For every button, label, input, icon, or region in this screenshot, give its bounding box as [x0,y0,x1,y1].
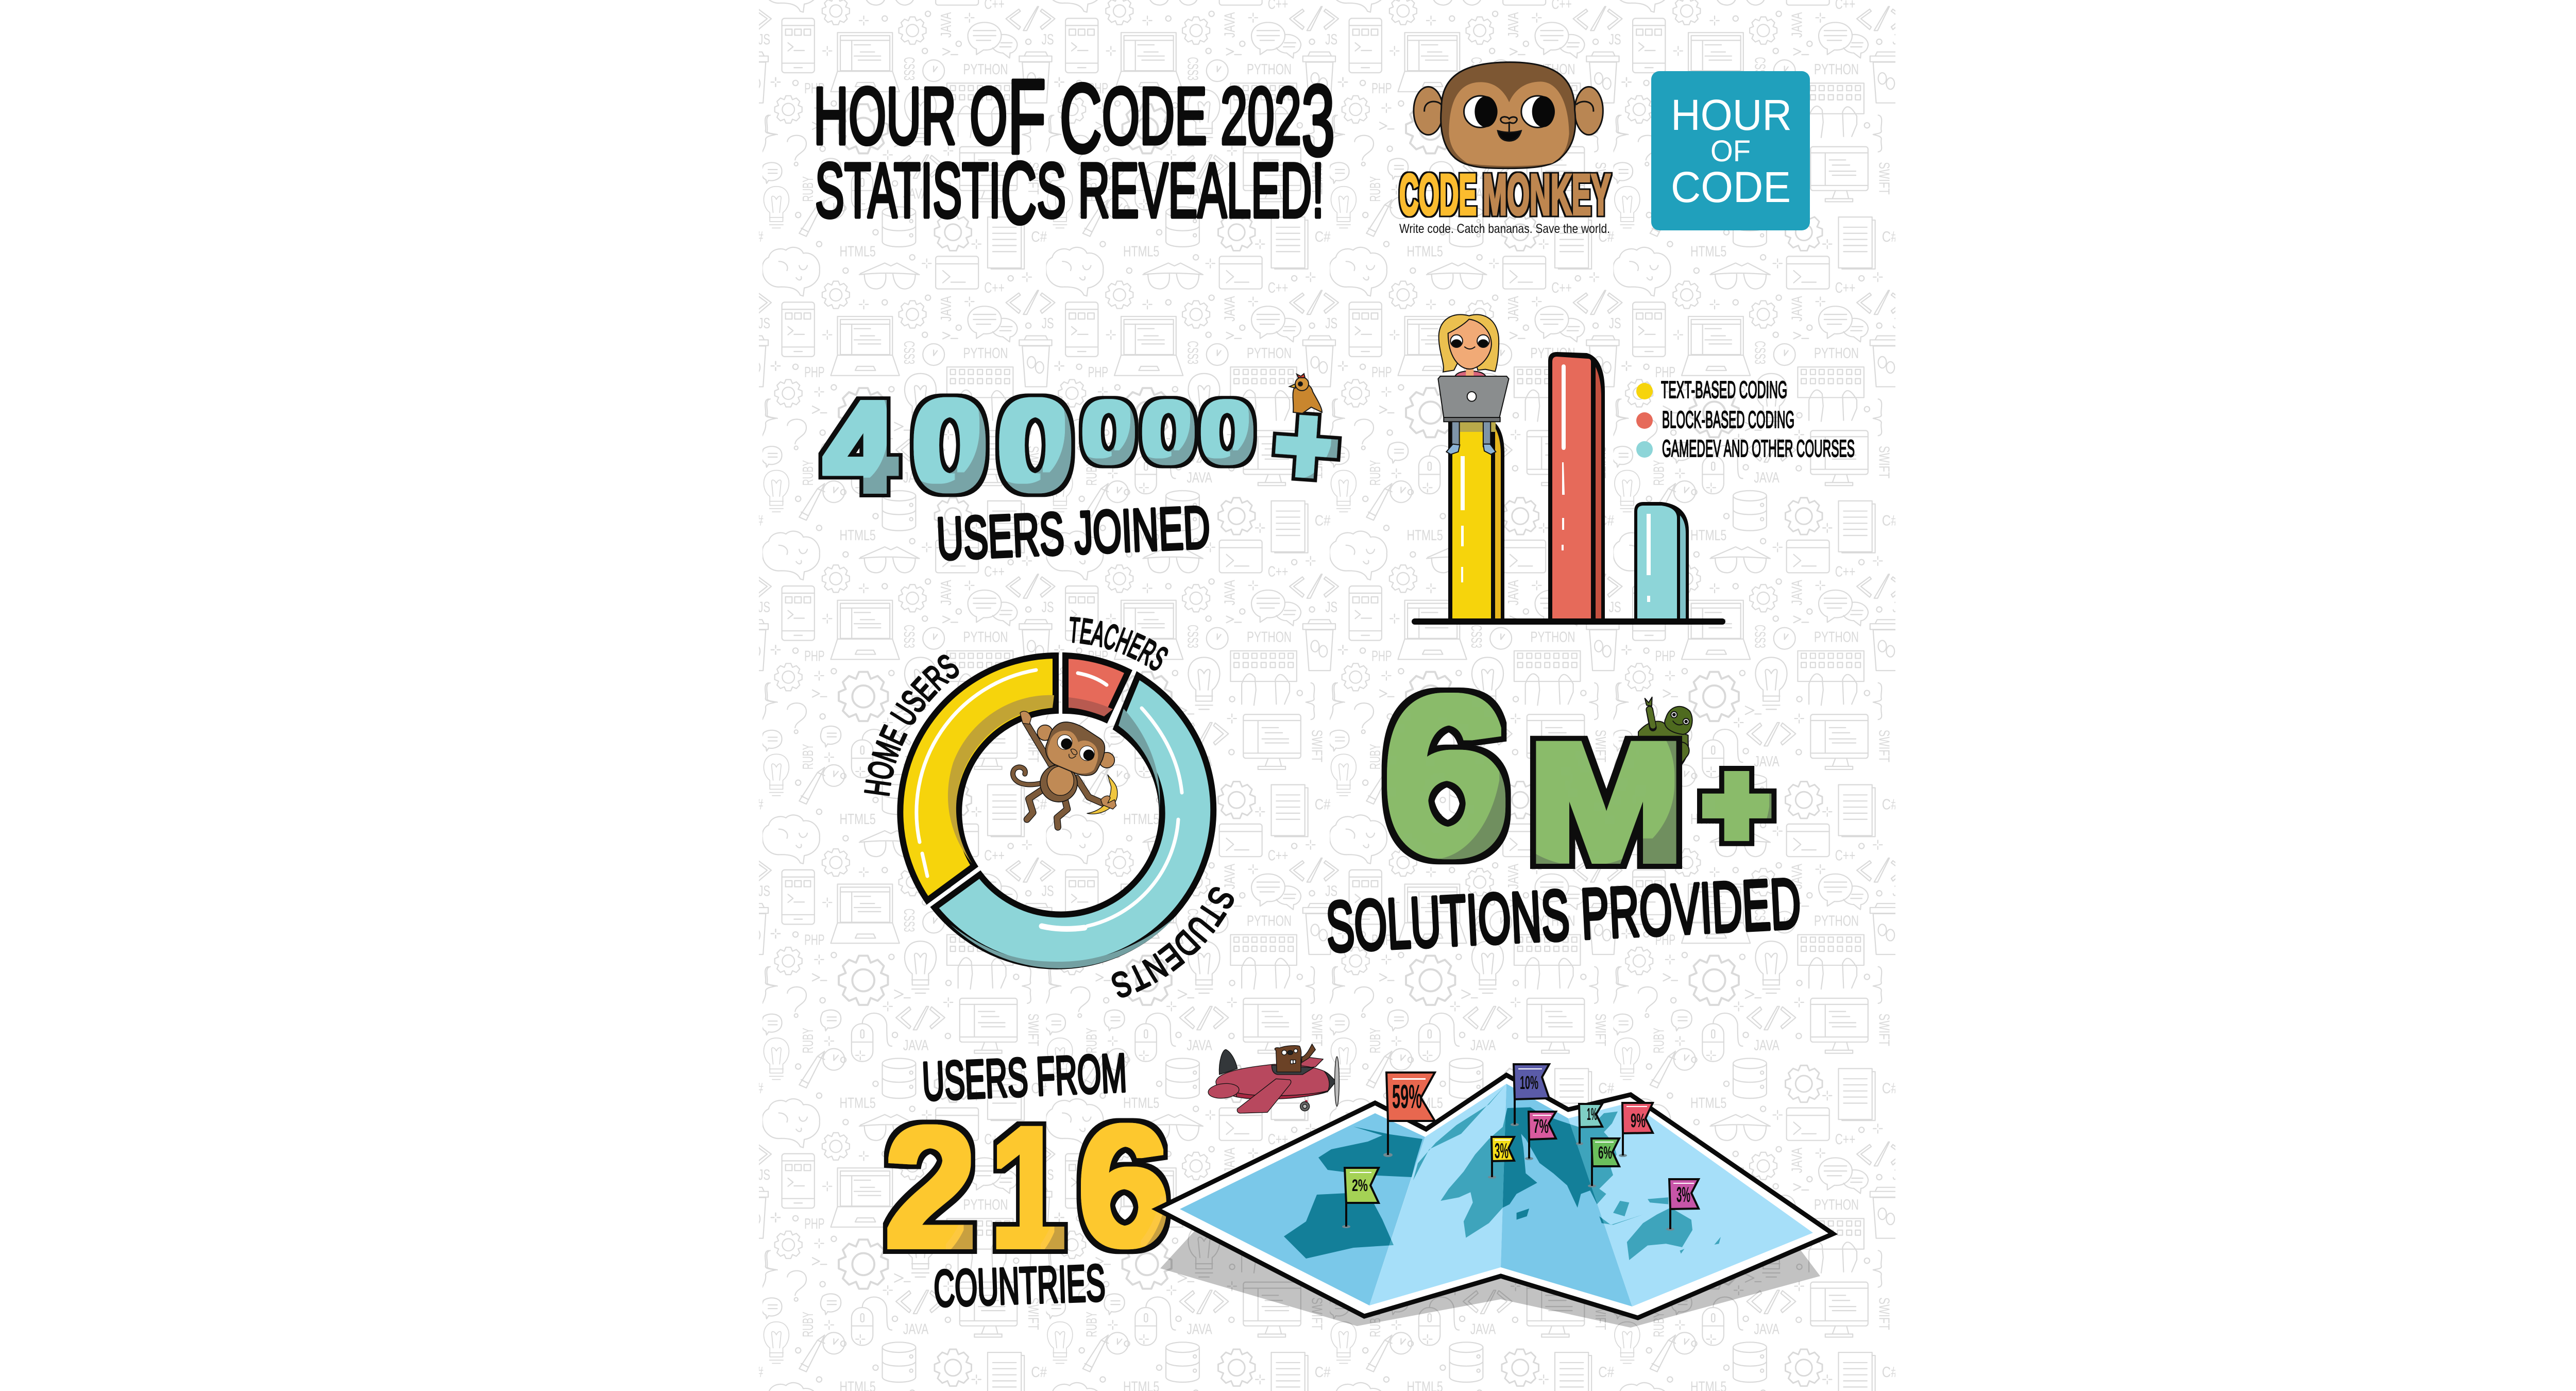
bar: text-based coding [1448,420,1504,621]
map sheet border [1157,1075,1833,1318]
continents [1284,1086,1721,1260]
title: S REVEALED! [1037,147,1324,233]
logo: Hour of Code: HOUR [1671,91,1792,139]
title: 3 [1301,64,1335,177]
label: students: STUDENTS [1112,887,1234,998]
donut chart [864,616,1234,998]
background pattern panel [759,0,1895,1391]
stat: 6M+ solutions provided [1324,650,1803,967]
label: home users: HOME USERS [864,655,959,796]
big number 400000+: 0 [997,374,1074,516]
wordmark: MONKEY [1483,163,1611,227]
big number 6M+ [1383,650,1770,900]
map shadow [1160,1185,1820,1328]
icon: woman with laptop [1438,314,1509,455]
icon: plane with beaver [1208,1044,1339,1113]
big number 400000+: 0 [1081,383,1137,481]
big number 216: 2 [884,1092,977,1283]
flag: 10%: 10% [1520,1072,1538,1093]
flag: 1%: 1% [1587,1104,1597,1124]
flag: 9% [1619,1103,1653,1157]
flag: 7% [1525,1112,1556,1160]
flag: 7%: 7% [1533,1116,1549,1137]
title: ODE 202 [1102,71,1301,161]
bar chart [1412,314,1725,625]
big number 400000+: 0 [1141,383,1196,481]
big number 6M+: M [1528,709,1684,895]
label: teachers: TEACHERS [1070,616,1168,671]
segment: students [935,676,1213,968]
big number 216 [884,1090,1170,1283]
big number 400000+: 4 [823,376,896,518]
flag: 9%: 9% [1631,1110,1646,1132]
legend [1636,376,1855,462]
axis [1412,618,1725,625]
segment: teachers [1065,656,1128,719]
flag: 3% pink: 3% [1676,1182,1690,1206]
map panels [1180,1084,1813,1306]
big number 216: 6 [1077,1090,1170,1282]
caption bottom: COUNTRIES [933,1254,1106,1318]
stat: 400000+ users joined [823,374,1343,573]
legend: BLOCK-BASED CODING [1662,406,1794,433]
icon: monkey head [1414,62,1603,169]
world map [1157,1064,1833,1328]
legend: TEXT-BASED CODING [1661,376,1787,403]
stat: users from 216 countries [884,1043,1170,1318]
flag: 59% [1383,1072,1435,1157]
big number 216: 1 [990,1092,1066,1283]
big number 6M+: + [1704,741,1770,868]
icon: chicken [1290,374,1322,413]
flag: 3% yellow [1488,1137,1514,1179]
wordmark: CODE [1399,163,1477,227]
big number 6M+: 6 [1383,650,1510,900]
logo: Hour of Code [1651,71,1810,230]
logo: Hour of Code: OF [1710,135,1751,168]
bar: block-based coding [1548,352,1605,621]
segment: home users [900,656,1056,900]
title: C [1001,144,1037,242]
flag: 6%: 6% [1598,1143,1612,1163]
caption: SOLUTIONS PROVIDED [1324,864,1803,967]
flag: 3% yellow: 3% [1495,1138,1509,1163]
title [814,58,1335,242]
title: C [1060,64,1102,173]
flag: 2% [1342,1168,1379,1228]
flag: 3% pink [1666,1179,1699,1231]
flag: 59%: 59% [1392,1078,1422,1115]
bar: gamedev and other courses [1634,502,1689,621]
big number 400000+: 0 [911,374,988,516]
title: F [1007,58,1046,176]
big number 400000+ [823,374,1343,518]
caption: USERS JOINED [935,494,1211,573]
big number 400000+: 0 [1199,383,1255,481]
flag: 1% [1576,1104,1602,1145]
caption top: USERS FROM [921,1043,1128,1112]
flag: 2%: 2% [1352,1176,1368,1195]
text: GAMEDEV AND OTHER COURSES [1662,435,1855,462]
logo: Hour of Code: CODE [1671,163,1791,211]
title: HOUR O [814,71,1137,161]
flag: 10% [1511,1064,1549,1126]
tagline: Write code. Catch bananas. Save the world. [1399,222,1610,236]
flag: 6% [1588,1138,1619,1187]
logo: CodeMonkey [1399,62,1611,236]
icon: turtle [1638,697,1692,772]
big number 400000+: + [1270,381,1343,509]
icon: hanging monkey with banana [1013,711,1117,827]
title: STATISTI [815,147,1143,233]
